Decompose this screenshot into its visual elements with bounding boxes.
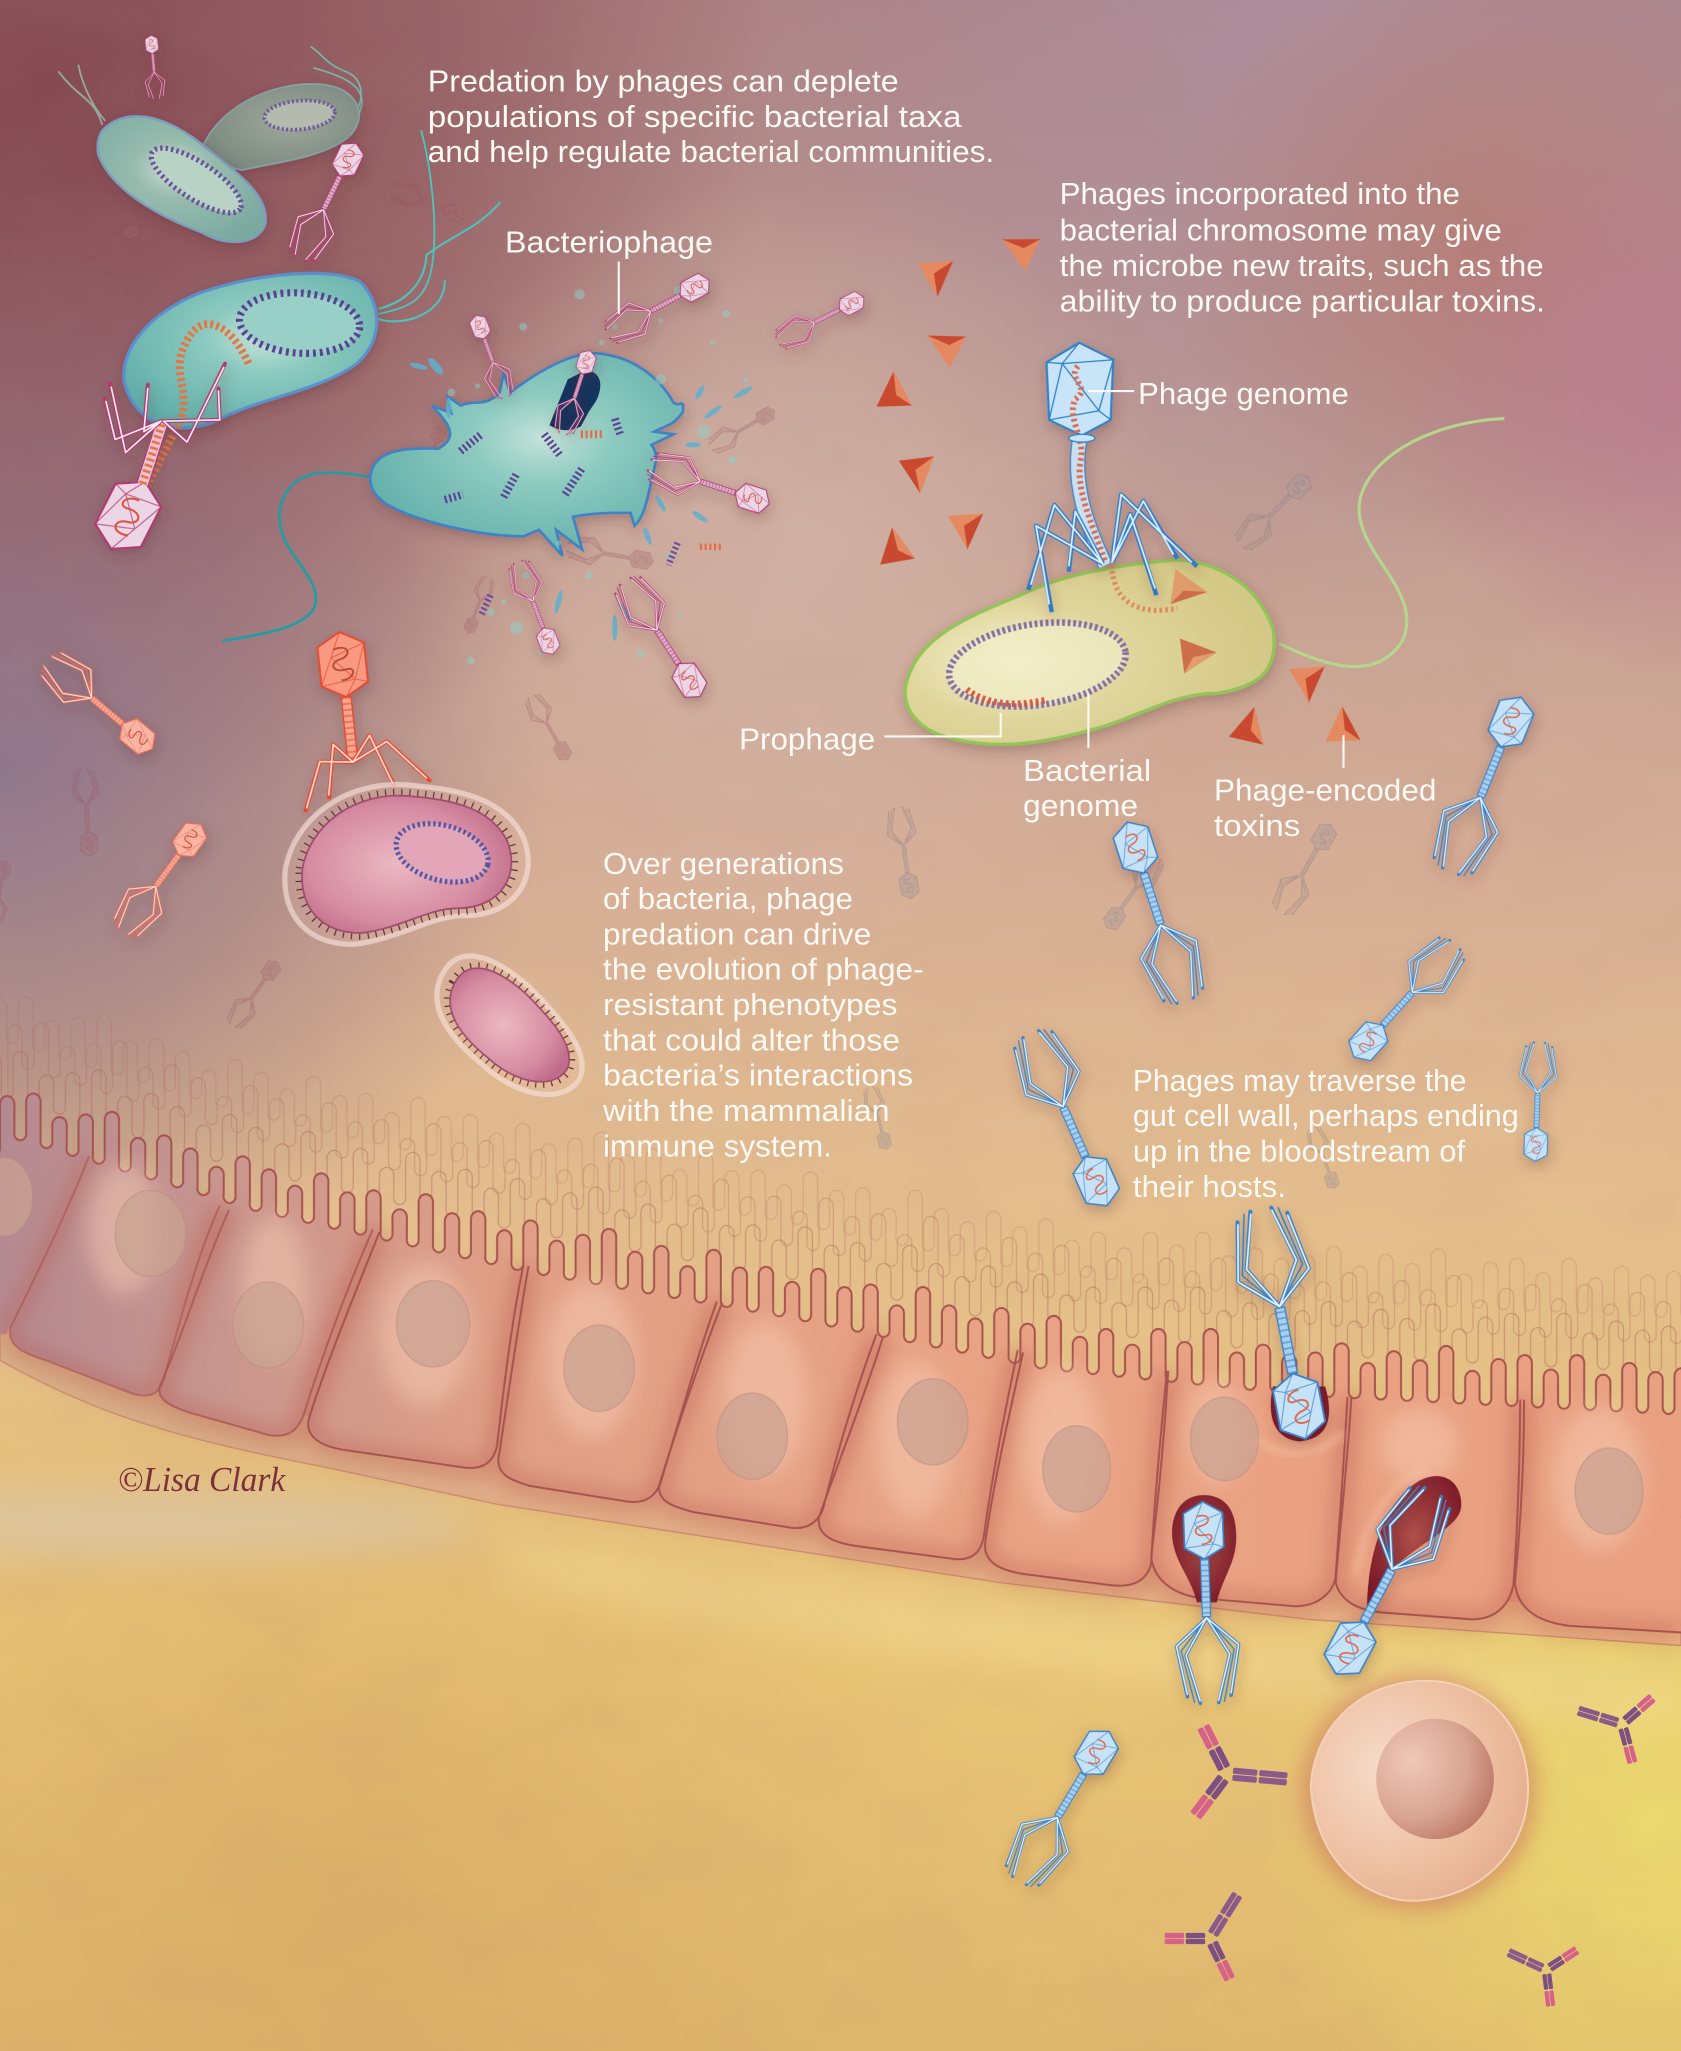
flagellum of yellow bacterium <box>1279 419 1504 667</box>
text: incorporated phages: bacterial chromosome may give <box>1060 215 1502 248</box>
antibodies <box>1160 1675 1657 2010</box>
text: traversing gut wall: up in the bloodstream of <box>1133 1136 1466 1169</box>
label: bacterial genome: genome <box>1023 790 1138 823</box>
nucleus <box>1376 1719 1494 1839</box>
debris around lysing bacterium <box>409 286 753 664</box>
text: incorporated phages: Phages incorporated into the <box>1060 178 1460 211</box>
leader line: bacteriophage <box>618 262 620 314</box>
label: phage genome: Phage genome <box>1138 378 1349 411</box>
DNA fragments <box>445 419 620 500</box>
phage attacking teal bacterium <box>88 364 225 560</box>
text: traversing gut wall <box>1133 1065 1519 1204</box>
text: evolution of resistance: bacteria’s interactions <box>603 1060 913 1093</box>
toxins <box>875 223 1360 746</box>
leader line: bacterial genome <box>1087 693 1089 748</box>
endocytosis pockets <box>1172 1387 1461 1609</box>
tissue behind cell junctions <box>0 1177 1681 1622</box>
large blue phage <box>1028 343 1197 612</box>
bacterium: grey-teal <box>98 116 266 242</box>
prophage segment <box>967 689 1047 704</box>
cell shading <box>10 1156 1681 1632</box>
flagella of teal bacteria <box>59 47 500 321</box>
epithelial cells <box>0 1151 1681 1632</box>
signature: ©Lisa Clark <box>118 1460 286 1499</box>
text: evolution of resistance: with the mammalian <box>602 1095 890 1128</box>
text: traversing gut wall: their hosts. <box>1133 1171 1286 1204</box>
hole in cell wall <box>549 370 600 430</box>
text: incorporated phages: ability to produce particular toxins. <box>1060 285 1545 318</box>
label: prophage: Prophage <box>739 724 875 757</box>
basement membrane strip <box>0 1308 1681 1646</box>
bacterium: grey, background <box>203 84 359 170</box>
pink phages <box>141 34 871 708</box>
text: predation: and help regulate bacterial communities. <box>428 136 994 169</box>
phages crossing cell wall and free blue phages <box>996 686 1558 1894</box>
microvilli front row <box>0 1094 1681 1517</box>
text: evolution of resistance <box>602 848 924 1163</box>
label: bacteriophage: Bacteriophage <box>505 226 713 259</box>
text: evolution of resistance: the evolution of phage- <box>603 954 924 987</box>
text: incorporated phages <box>1060 178 1545 318</box>
text: evolution of resistance: immune system. <box>603 1130 832 1163</box>
text: predation: Predation by phages can deplete <box>428 66 899 99</box>
text: evolution of resistance: of bacteria, phage <box>603 883 853 916</box>
bacterium: yellow with prophage <box>905 560 1274 744</box>
faint phages in background <box>0 177 1345 1192</box>
cell outlines <box>10 1156 1681 1632</box>
label: phage-encoded toxins <box>1214 775 1436 843</box>
flagellum of lysing bacterium <box>222 472 373 641</box>
red phage landing on capsule <box>287 624 431 810</box>
surface hairs <box>302 796 511 933</box>
text: traversing gut wall: Phages may traverse the <box>1133 1065 1466 1098</box>
text: predation: populations of specific bacterial taxa <box>428 101 962 134</box>
microvilli ghost rows <box>0 997 1681 1475</box>
salmon phages <box>34 645 217 944</box>
leader line: toxins <box>1342 735 1344 768</box>
label: phage-encoded toxins: Phage-encoded <box>1214 775 1436 808</box>
toxin cone <box>994 223 1042 271</box>
phage genome injected into bacterium <box>147 324 249 487</box>
bacterial genome ring <box>944 612 1131 717</box>
small pink bacterium <box>437 956 582 1094</box>
white blood cell <box>1302 1674 1537 1910</box>
bacterium: lysing <box>370 353 683 556</box>
bacterial genome ring <box>237 289 362 357</box>
text: evolution of resistance: that could alter those <box>603 1024 900 1057</box>
text: traversing gut wall: gut cell wall, perhaps ending <box>1133 1100 1519 1133</box>
bacterium: infected teal <box>124 273 377 428</box>
leader line: prophage <box>884 713 1001 736</box>
text: evolution of resistance: predation can drive <box>603 918 871 951</box>
text: incorporated phages: the microbe new traits, such as the <box>1060 250 1544 283</box>
label: phage-encoded toxins: toxins <box>1214 810 1300 843</box>
text: evolution of resistance: resistant phenotypes <box>603 989 897 1022</box>
injected DNA <box>1112 565 1177 610</box>
leader line: phage genome <box>1088 390 1134 392</box>
label: bacterial genome <box>1023 755 1151 823</box>
pink bacterium with capsule <box>285 785 528 944</box>
label: bacterial genome: Bacterial <box>1023 755 1151 788</box>
text: predation <box>428 66 994 169</box>
haze below epithelium <box>0 1490 1681 1700</box>
text: evolution of resistance: Over generations <box>603 848 844 881</box>
nuclei <box>0 1158 1643 1534</box>
